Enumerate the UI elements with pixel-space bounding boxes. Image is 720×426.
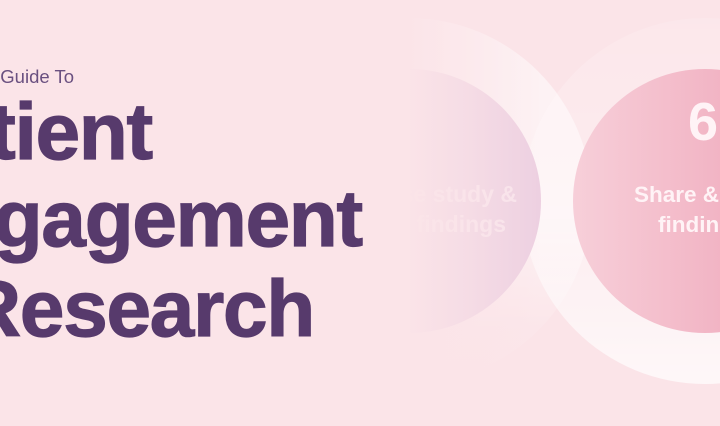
step 5 circle with ring and label [226, 18, 592, 384]
step 5 circle with ring and label: Close study & [364, 181, 517, 207]
left cover [0, 0, 410, 426]
fade over step 5 [410, 0, 540, 426]
step 5 circle with ring and label: share findings [349, 211, 506, 237]
title [0, 87, 363, 353]
step 6 outer ring [522, 18, 720, 384]
step 6 circle with label: 6 [688, 92, 718, 152]
step 6 circle with label [573, 69, 720, 333]
